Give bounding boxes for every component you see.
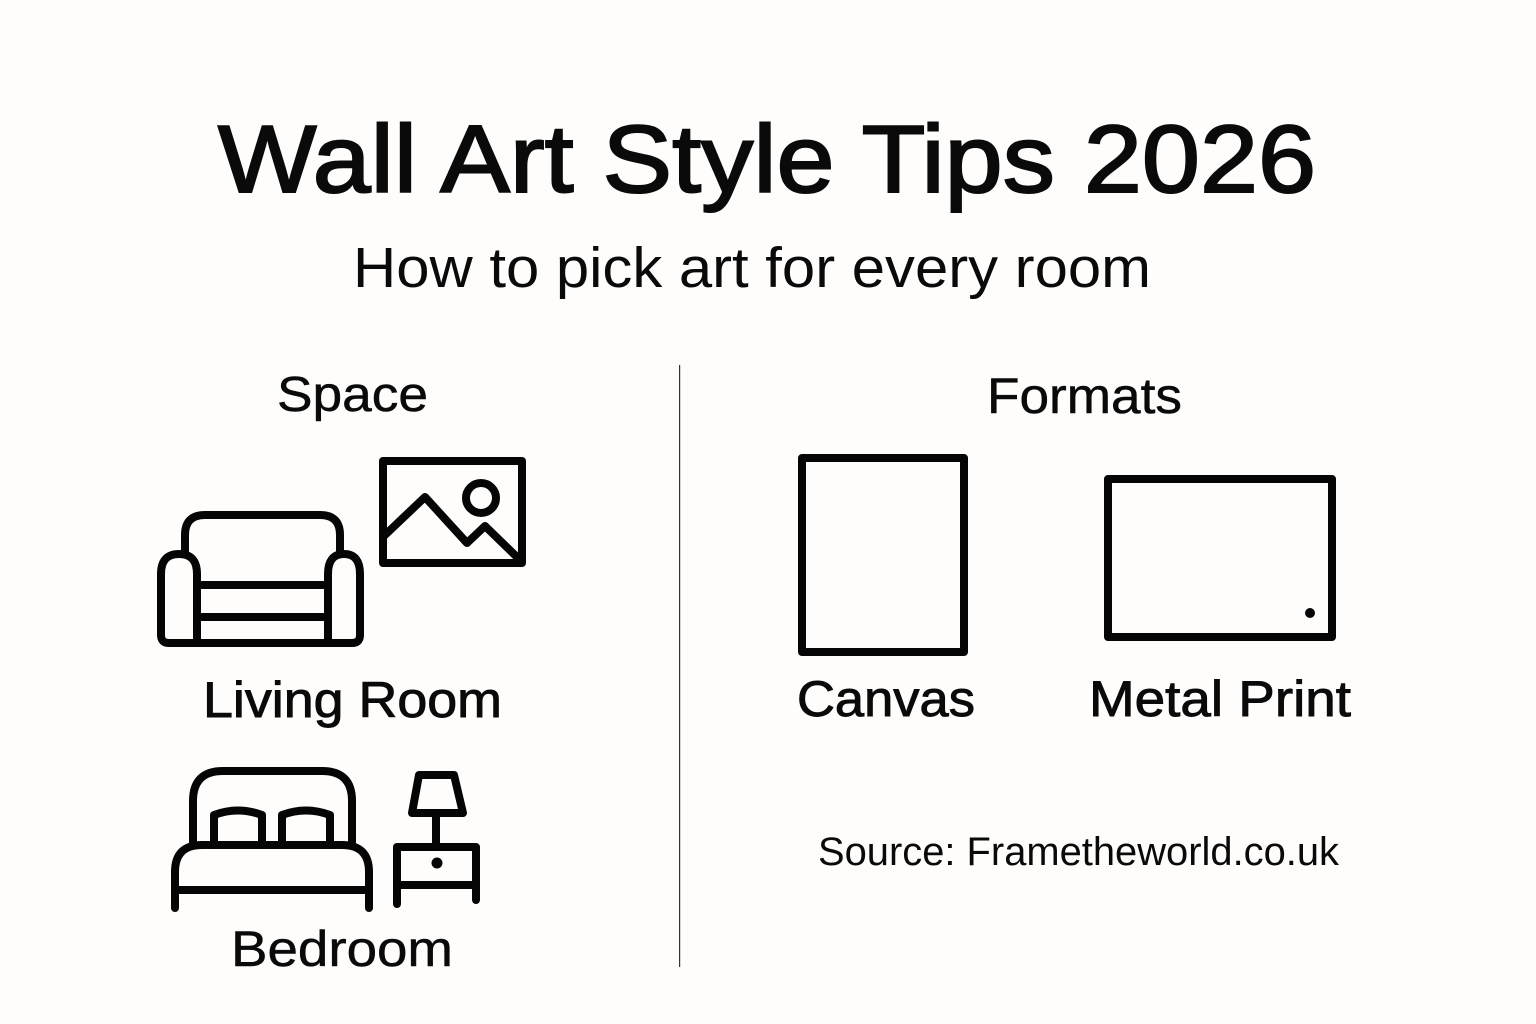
icon: bed [175, 771, 369, 908]
icon: bedside lamp and table [397, 775, 476, 904]
panel: space [161, 368, 522, 977]
icon: canvas frame [802, 458, 964, 652]
label: living room: Living Room [203, 672, 502, 728]
title: Wall Art Style Tips 2026 [218, 106, 1316, 213]
icon: sofa [161, 515, 360, 643]
label: bedroom: Bedroom [231, 921, 453, 977]
label: metal print: Metal Print [1089, 671, 1351, 727]
icon: framed picture [383, 461, 522, 563]
icon: metal print frame [1108, 479, 1332, 637]
heading: formats: Formats [987, 368, 1182, 424]
subtitle: How to pick art for every room [353, 236, 1151, 300]
heading: space: Space [277, 368, 428, 422]
label: canvas: Canvas [797, 671, 975, 727]
panel: formats [797, 368, 1351, 874]
source note: Source: Frametheworld.co.uk [818, 830, 1340, 874]
